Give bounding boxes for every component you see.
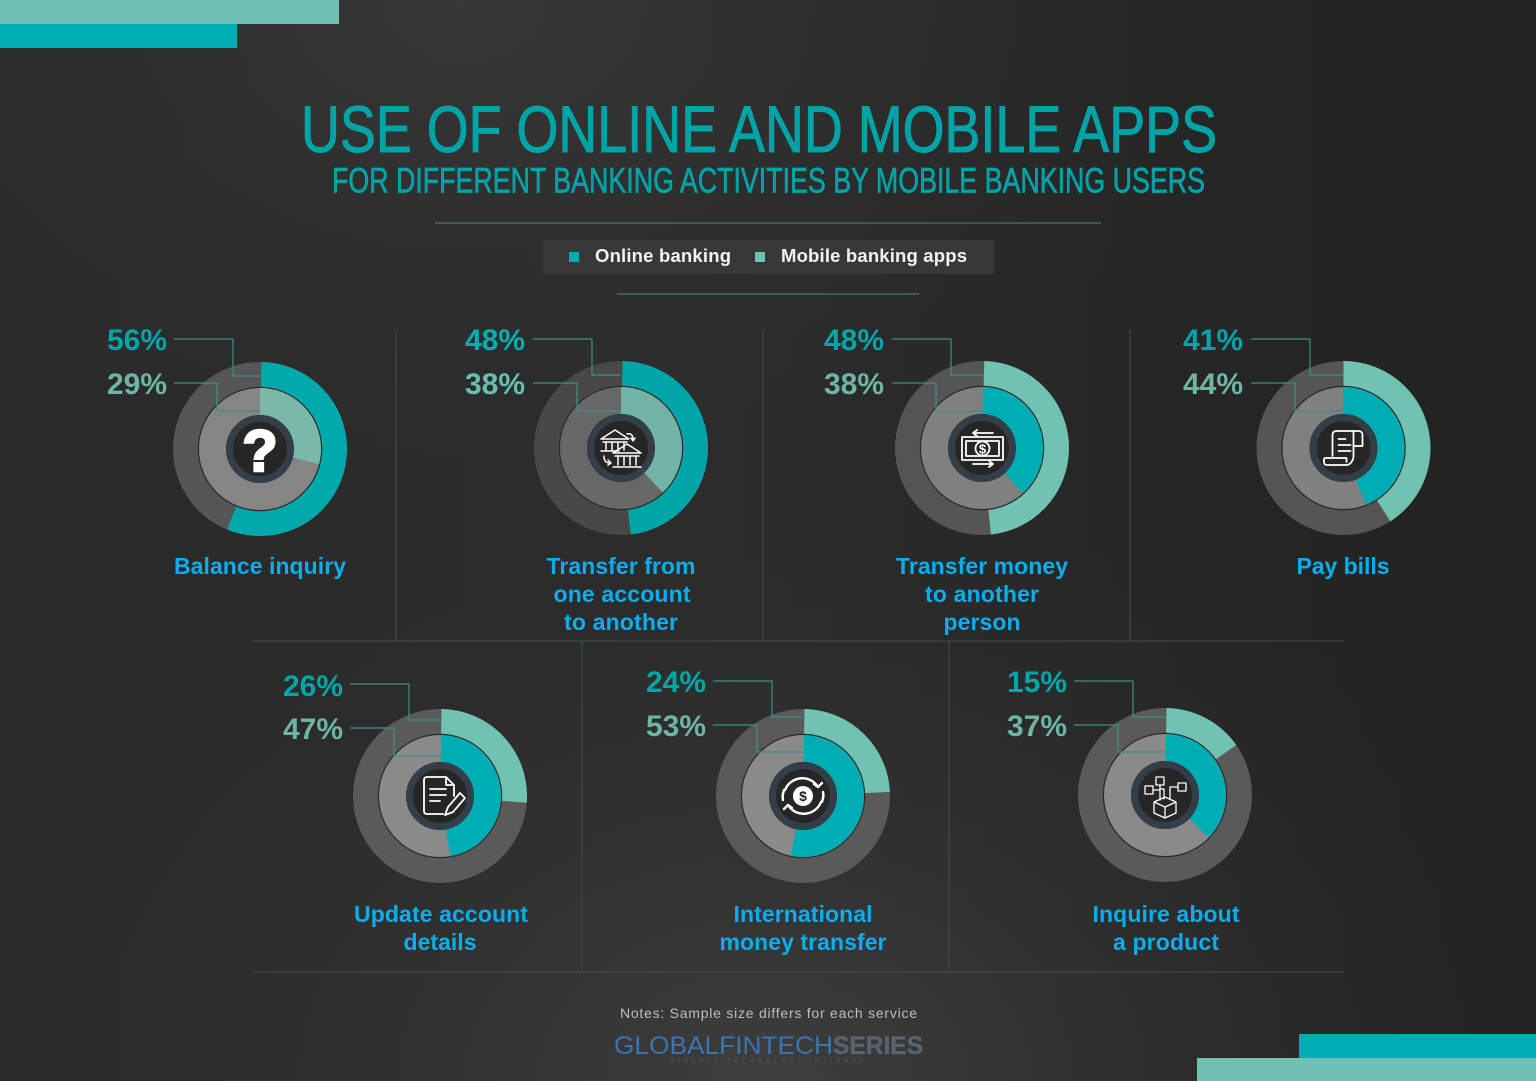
icon: question mark: ? bbox=[242, 419, 278, 484]
logo: GLOBALFINTECH bbox=[614, 1032, 833, 1060]
leader lines bbox=[713, 681, 803, 752]
panel: update account details: details bbox=[404, 929, 476, 955]
icon: dollar sign: $ bbox=[979, 442, 987, 456]
logo bbox=[614, 1032, 923, 1065]
panel: transfer between accounts: to another bbox=[564, 609, 678, 635]
legend: Online banking bbox=[595, 245, 731, 266]
value: online: 47% bbox=[283, 713, 343, 746]
donut chart: transfer money bbox=[906, 372, 1058, 524]
notes: Notes: Sample size differs for each service bbox=[620, 1005, 917, 1021]
leader lines bbox=[1251, 339, 1343, 411]
icon: document and pencil bbox=[424, 777, 465, 815]
value: mobile: 38% bbox=[465, 368, 525, 401]
icon: banknote bbox=[962, 430, 1003, 467]
icon: receipt bbox=[1324, 431, 1362, 465]
donut chart: international transfer bbox=[727, 720, 879, 872]
donut chart: pay bills bbox=[1269, 374, 1418, 522]
donut chart: inquire about product bbox=[1089, 719, 1241, 871]
value: online: 38% bbox=[824, 368, 884, 401]
panel: update account details bbox=[283, 670, 528, 955]
panel: international money transfer bbox=[646, 666, 887, 955]
label: Transfer money bbox=[896, 553, 1068, 579]
logo: FINANCE TECHNOLOGY INSIGHTS bbox=[671, 1059, 863, 1065]
leader lines bbox=[1074, 681, 1166, 752]
value: online: 44% bbox=[1183, 368, 1243, 401]
panel: pay bills bbox=[1183, 324, 1418, 579]
value: mobile: 24% bbox=[646, 666, 706, 699]
panel: inquire about a product: a product bbox=[1113, 929, 1219, 955]
donut chart: update account bbox=[364, 720, 516, 872]
panel: transfer between accounts bbox=[465, 324, 697, 635]
donut chart: balance inquiry bbox=[184, 373, 336, 525]
label: Balance inquiry bbox=[174, 553, 346, 579]
donut chart: transfer from one account bbox=[545, 372, 697, 524]
label: Transfer from bbox=[546, 553, 696, 579]
legend: Mobile banking apps bbox=[781, 245, 967, 266]
value: online: 37% bbox=[1007, 710, 1067, 743]
leader lines bbox=[892, 339, 983, 411]
subtitle: FOR DIFFERENT BANKING ACTIVITIES BY MOBILE BANKING USERS bbox=[332, 160, 1205, 200]
legend bbox=[543, 240, 994, 274]
value: mobile: 48% bbox=[824, 324, 884, 357]
label: Pay bills bbox=[1296, 553, 1390, 579]
value: online: 53% bbox=[646, 710, 706, 743]
label: Inquire about bbox=[1092, 901, 1240, 927]
icon: circular money transfer bbox=[783, 778, 823, 814]
icon: banks bbox=[601, 430, 641, 467]
value: mobile: 41% bbox=[1183, 324, 1243, 357]
logo: SERIES bbox=[833, 1032, 923, 1060]
title: USE OF ONLINE AND MOBILE APPS bbox=[301, 92, 1217, 166]
value: mobile: 26% bbox=[283, 670, 343, 703]
value: mobile: 15% bbox=[1007, 666, 1067, 699]
bottom right corner bars bbox=[1197, 1034, 1536, 1081]
leader lines bbox=[533, 339, 621, 411]
panel: international money transfer: money transfer bbox=[720, 929, 887, 955]
label: International bbox=[734, 901, 872, 927]
icon: circular money transfer: $ bbox=[799, 788, 807, 804]
leader lines bbox=[174, 339, 262, 411]
panel: transfer money: person bbox=[944, 609, 1020, 635]
panel: transfer money: to another bbox=[925, 581, 1039, 607]
panel: transfer between accounts: one account bbox=[554, 581, 691, 607]
panel: transfer money bbox=[824, 324, 1068, 635]
label: Update account bbox=[354, 901, 528, 927]
value: online: 56% bbox=[107, 324, 167, 357]
leader lines bbox=[350, 684, 441, 756]
panel: inquire about a product bbox=[1007, 666, 1241, 955]
value: mobile: 29% bbox=[107, 368, 167, 401]
top left corner bars bbox=[0, 0, 339, 48]
value: online: 48% bbox=[465, 324, 525, 357]
icon: product box network bbox=[1145, 777, 1186, 818]
panel: balance inquiry bbox=[107, 324, 346, 579]
